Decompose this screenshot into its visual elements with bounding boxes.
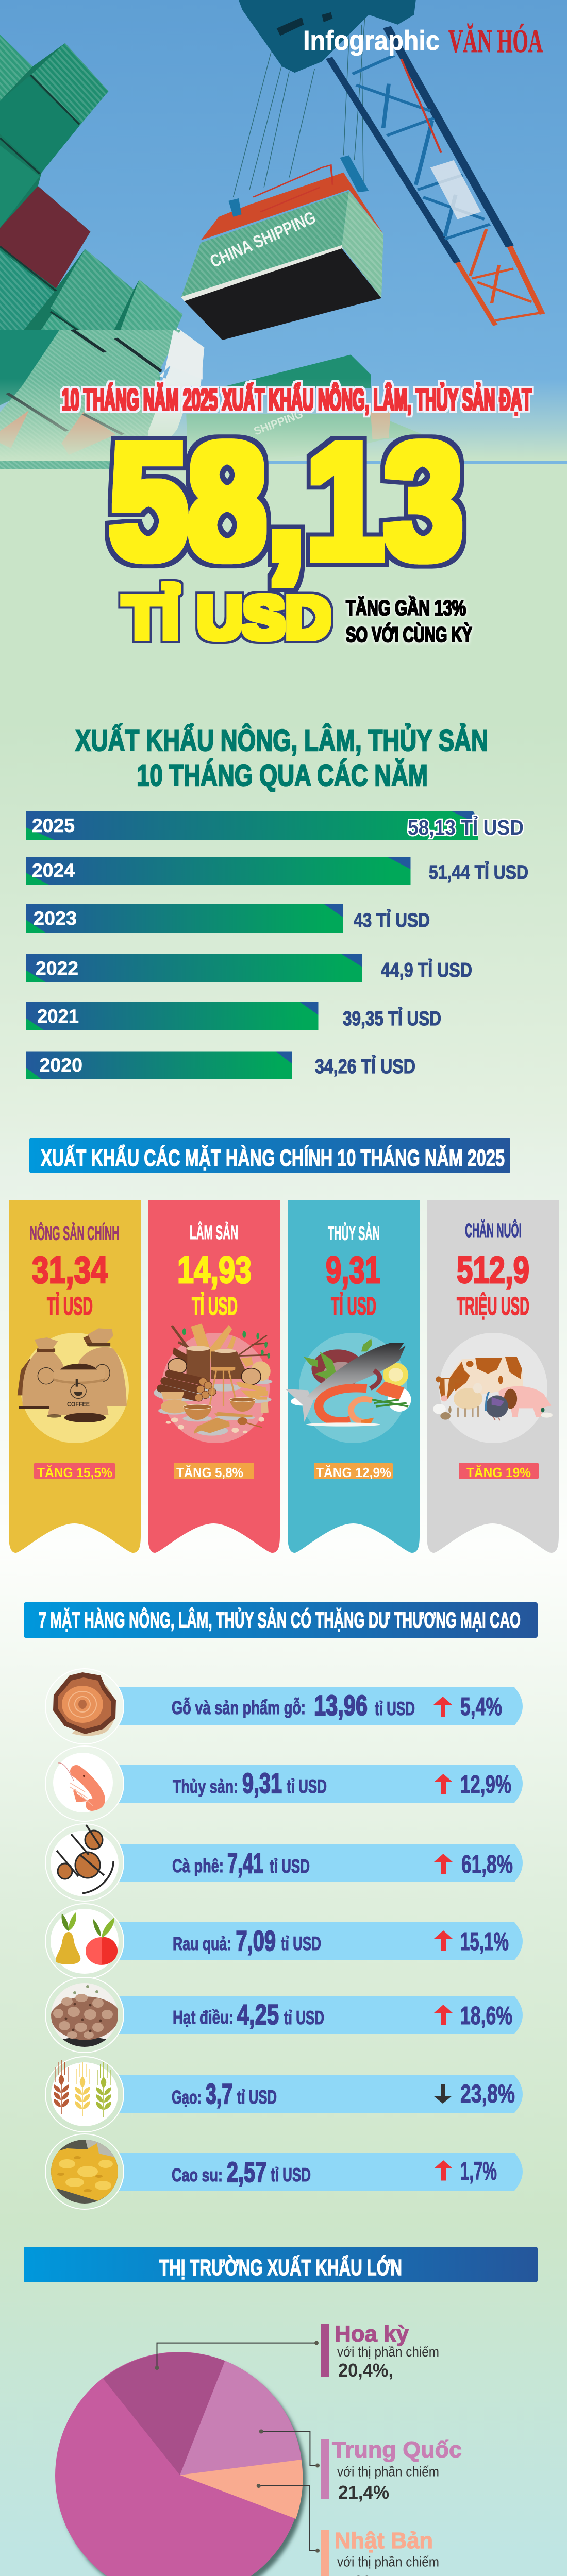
arrow up — [434, 2005, 453, 2025]
values: tỉ USD — [271, 2164, 311, 2185]
section heading: exports by year — [75, 724, 488, 792]
value: 9,31 — [326, 1249, 380, 1291]
bar 2021: 39,35 TỈ USD — [343, 1007, 441, 1030]
values: 7,41 — [227, 1847, 263, 1879]
values: 1,7% — [460, 2158, 497, 2185]
bar 2023: 43 TỈ USD — [354, 909, 430, 931]
values: 15,1% — [460, 1928, 509, 1956]
row: rau quả — [45, 1904, 523, 1979]
growth note: TĂNG GẦN 13% — [346, 596, 466, 620]
hero unit: TỈ USD — [123, 584, 331, 651]
unit: TỈ USD — [331, 1292, 376, 1320]
values: Cà phê: — [172, 1855, 224, 1876]
legend: Trung Quốc: với thị phần chiếm — [337, 2464, 439, 2479]
growth badge: TĂNG 5,8% — [176, 1465, 243, 1480]
icon: shrimp — [53, 1753, 113, 1812]
values: tỉ USD — [284, 2007, 324, 2028]
icon: rice stalks — [51, 2060, 118, 2126]
bar 2024: 51,44 TỈ USD — [429, 861, 528, 884]
arrow up — [434, 1774, 453, 1794]
row: thủy sản — [45, 1746, 523, 1821]
legend: Nhật Bản: với thị phần chiếm — [337, 2554, 439, 2570]
brand logo top: Infographic — [303, 25, 440, 56]
icon: coffee beans — [51, 1825, 119, 1896]
values — [173, 1925, 509, 1957]
values: Hạt điều: — [173, 2007, 234, 2028]
bar 2023 — [26, 904, 430, 933]
values: 5,4% — [460, 1693, 502, 1721]
bar 2021: 2021 — [37, 1006, 79, 1027]
photo lettering on background container: SHIPPING — [252, 407, 305, 438]
values: tỉ USD — [270, 1856, 310, 1877]
values: 61,8% — [461, 1851, 513, 1878]
values: Cao su: — [172, 2164, 223, 2185]
values: Rau quả: — [173, 1933, 231, 1954]
row: cao su — [45, 2134, 523, 2209]
values: 13,96 — [314, 1689, 368, 1721]
value: 14,93 — [177, 1249, 252, 1291]
bar 2022: 44,9 TỈ USD — [381, 959, 472, 981]
bar 2021 — [26, 1002, 441, 1030]
arrow up — [434, 2160, 453, 2180]
values: tỉ USD — [287, 1776, 327, 1797]
values: Gạo: — [172, 2087, 202, 2108]
values: Gỗ và sản phẩm gỗ: — [172, 1697, 306, 1718]
values: 2,57 — [227, 2156, 266, 2188]
unit: TỈ USD — [192, 1292, 238, 1320]
unit: TỈ USD — [47, 1292, 93, 1320]
bar 2020 — [26, 1051, 415, 1079]
photo lettering on hanging container: CHINA SHIPPING — [207, 208, 319, 272]
growth badge: TĂNG 15,5% — [37, 1465, 112, 1480]
section heading: exports by year: 10 THÁNG QUA CÁC NĂM — [137, 759, 428, 792]
legend: Trung Quốc: Trung Quốc — [332, 2437, 462, 2463]
icon: pear and apple — [51, 1909, 119, 1974]
icon: cashew nuts — [51, 1983, 119, 2049]
values: tỉ USD — [375, 1698, 415, 1719]
section banner: main commodities — [29, 1138, 510, 1173]
row: gỗ — [45, 1669, 523, 1744]
hero number: 58,13 — [109, 409, 463, 593]
values — [173, 1767, 511, 1799]
panel title: LÂM SẢN — [190, 1221, 238, 1244]
panel: thủy sản — [286, 1200, 420, 1553]
arrow up — [434, 1854, 453, 1874]
legend: Trung Quốc: 21,4% — [338, 2482, 389, 2503]
values — [173, 1998, 512, 2030]
values: 7,09 — [236, 1925, 276, 1957]
pie chart: market share — [55, 2352, 303, 2576]
row: cà phê — [45, 1824, 523, 1901]
bar 2025: 58,13 TỈ USD — [408, 816, 524, 839]
values — [172, 1689, 502, 1721]
values: tỉ USD — [281, 1933, 321, 1954]
panel: chăn nuôi — [427, 1200, 559, 1553]
legend: Nhật Bản — [321, 2528, 439, 2576]
sack label: COFFEE — [67, 1400, 90, 1408]
panel title: NÔNG SẢN CHÍNH — [30, 1221, 120, 1245]
values: 4,25 — [237, 1998, 279, 2030]
legend: Trung Quốc — [321, 2437, 462, 2503]
bar chart: exports 2020-2025 — [26, 811, 528, 1079]
bar 2025 — [26, 811, 524, 840]
row: hạt điều — [45, 1977, 523, 2053]
bar 2025: 2025 — [32, 815, 75, 836]
value: 512,9 — [457, 1249, 529, 1291]
icon: coffee sacks — [18, 1328, 129, 1443]
bar 2023: 2023 — [34, 908, 77, 929]
bar 2024 — [26, 857, 528, 885]
values: Thủy sản: — [173, 1776, 238, 1797]
values — [172, 1847, 513, 1879]
brand logo top — [303, 23, 543, 59]
values — [172, 2156, 497, 2188]
bar 2022 — [26, 954, 472, 982]
icon: fish and seafood — [286, 1333, 411, 1443]
values: 9,31 — [242, 1767, 282, 1799]
panel: nông sản chính — [9, 1200, 141, 1553]
values: 18,6% — [460, 2002, 512, 2030]
growth note: SO VỚI CÙNG KỲ — [346, 622, 472, 647]
values: 23,8% — [460, 2080, 515, 2108]
growth note — [346, 596, 472, 647]
section banner: 7 products — [24, 1602, 538, 1638]
icon: farm animals — [433, 1333, 553, 1443]
legend: Hoa Kỳ: với thị phần chiếm — [337, 2344, 439, 2360]
growth badge: TĂNG 12,9% — [316, 1465, 391, 1480]
values — [172, 2078, 515, 2110]
bar 2020: 2020 — [39, 1055, 82, 1076]
legend: Hoa Kỳ: 20,4%, — [338, 2360, 393, 2381]
bar 2022: 2022 — [36, 958, 78, 979]
arrow up — [433, 1697, 452, 1717]
icon: timber and wooden goods — [154, 1323, 272, 1443]
legend: Hoa Kỳ: Hoa kỳ — [335, 2321, 409, 2346]
values: 12,9% — [460, 1771, 511, 1799]
section banner: export markets: THỊ TRƯỜNG XUẤT KHẨU LỚN — [159, 2254, 402, 2280]
panel title: THỦY SẢN — [328, 1222, 380, 1245]
section banner: export markets — [24, 2247, 538, 2282]
bar 2024: 2024 — [32, 860, 75, 881]
leader lines — [155, 2341, 320, 2576]
legend: Nhật Bản: Nhật Bản — [335, 2528, 433, 2553]
row: gạo — [45, 2057, 523, 2132]
legend: Hoa Kỳ — [321, 2321, 439, 2381]
arrow down — [433, 2084, 452, 2104]
icon: raw rubber — [49, 2138, 121, 2204]
growth badge: TĂNG 19% — [466, 1465, 531, 1480]
value: 31,34 — [32, 1249, 108, 1291]
values: tỉ USD — [237, 2087, 277, 2108]
hero photo: container crane — [0, 0, 567, 469]
bar 2020: 34,26 TỈ USD — [315, 1055, 415, 1078]
icon: timber cross-section — [53, 1672, 116, 1736]
panel: lâm sản — [148, 1200, 280, 1553]
values: 3,7 — [206, 2078, 232, 2110]
arrow up — [434, 1930, 453, 1951]
